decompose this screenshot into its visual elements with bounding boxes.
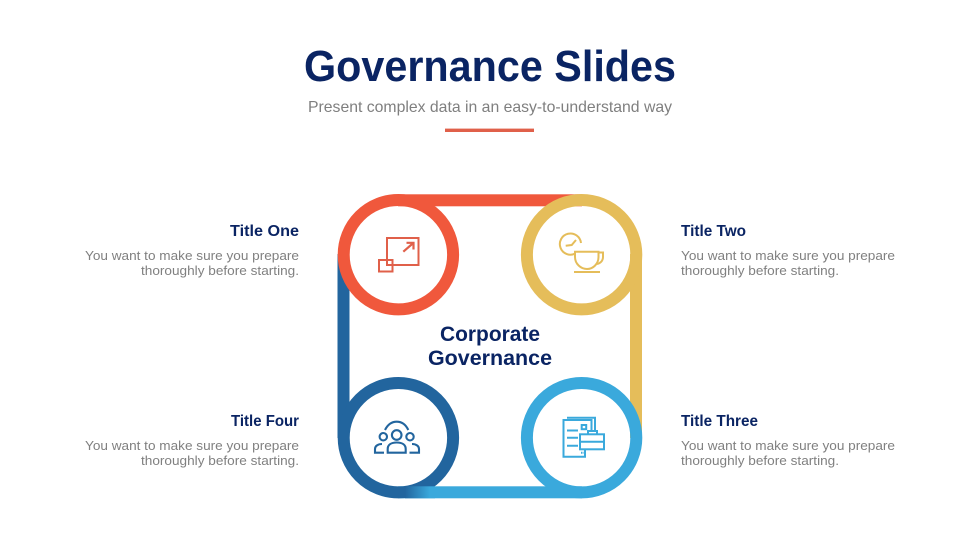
- heading: title two: Title Two: [681, 223, 746, 240]
- title underline: [445, 129, 534, 132]
- body line two: title one: thoroughly before starting.: [141, 263, 299, 278]
- panel: right top text block: [681, 223, 895, 278]
- ring: red: [344, 200, 453, 309]
- center label line two: Governance: [428, 347, 552, 370]
- body: title three: You want to make sure you prepare: [681, 438, 895, 453]
- heading: title one: Title One: [230, 223, 299, 240]
- connector: light blue bottom bar: [398, 486, 582, 498]
- ring: dark blue: [344, 383, 453, 492]
- panel: left bottom text block: [85, 413, 299, 468]
- body: title two: You want to make sure you prepare: [681, 248, 895, 263]
- body line two: title four: thoroughly before starting.: [141, 453, 299, 468]
- center label: [428, 323, 552, 370]
- body line two: title two: thoroughly before starting.: [681, 263, 839, 278]
- ring blend: dark blue fading into light blue bar: [405, 486, 435, 498]
- ring: yellow: [527, 200, 636, 309]
- ring: light blue: [527, 383, 636, 492]
- icon: people group: [375, 422, 419, 453]
- icon: clock and coffee cup: [560, 233, 603, 272]
- subtitle: Present complex data in an easy-to-understand way: [308, 99, 672, 116]
- icon: resize squares: [379, 238, 418, 272]
- panel: right bottom text block: [681, 413, 895, 468]
- body line two: title three: thoroughly before starting.: [681, 453, 839, 468]
- diagram: governance ring: [338, 194, 642, 498]
- body: title one: You want to make sure you prepare: [85, 248, 299, 263]
- heading: title three: Title Three: [681, 413, 758, 430]
- connector: yellow right bar: [630, 254, 642, 438]
- center label line one: Corporate: [440, 323, 540, 346]
- heading: title four: Title Four: [231, 413, 299, 430]
- connector: red top bar: [398, 194, 582, 206]
- title: Governance Slides: [304, 42, 676, 91]
- body: title four: You want to make sure you prepare: [85, 438, 299, 453]
- panel: left top text block: [85, 223, 299, 278]
- icon: documents and briefcase: [564, 418, 604, 457]
- connector: blue left bar: [338, 254, 350, 438]
